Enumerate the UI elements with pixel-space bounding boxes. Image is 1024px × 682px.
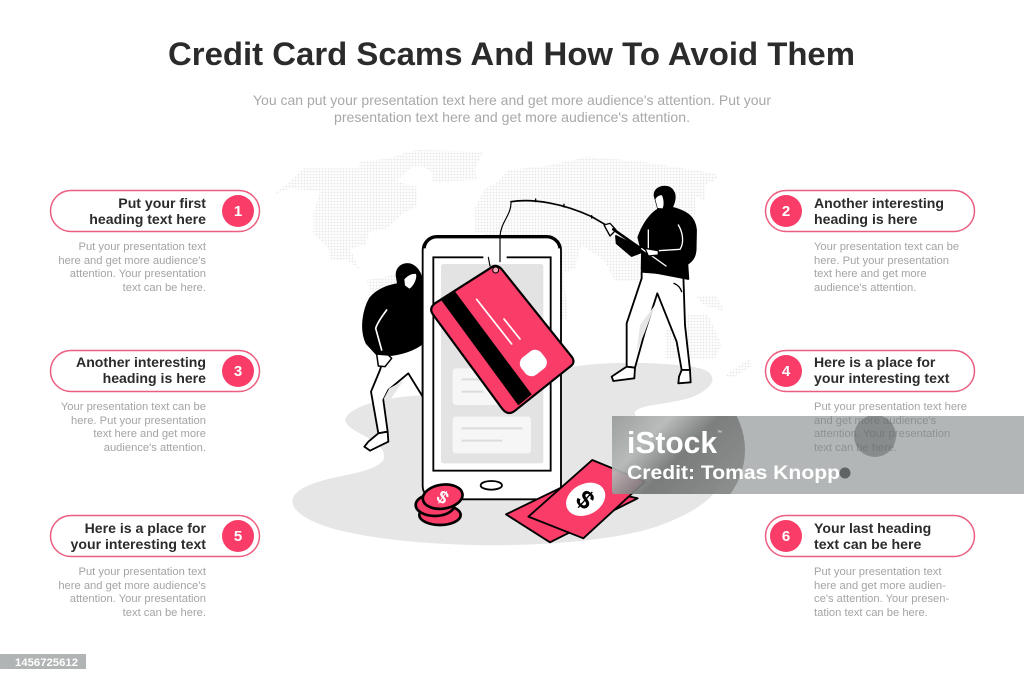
item 1: Put your first <box>118 195 206 211</box>
watermark: iStock <box>627 425 718 460</box>
world map <box>273 150 752 378</box>
subtitle: presentation text here and get more audience's attention. <box>334 110 690 125</box>
item 4: Here is a place for <box>814 354 936 370</box>
ground shadow <box>292 363 721 545</box>
illustration <box>273 150 752 545</box>
item 5: your interesting text <box>71 536 206 552</box>
banknotes <box>506 460 645 542</box>
watermark: ™ <box>717 430 722 436</box>
item 3: 3 <box>234 363 242 380</box>
item 2: here. Put your presentation <box>814 255 949 267</box>
item 3: here. Put your presentation <box>71 415 206 427</box>
item 3 <box>50 350 260 454</box>
item 1 <box>50 190 260 294</box>
item 1: text can be here. <box>123 282 206 294</box>
item 6: Put your presentation text <box>814 566 942 578</box>
coins: $ <box>433 486 453 508</box>
item 5: here and get more audience's <box>58 580 206 592</box>
fishing rod and line <box>488 199 613 266</box>
item 4: 4 <box>782 363 791 380</box>
watermark <box>612 416 1024 494</box>
watermark: Credit: Tomas Knopp <box>627 463 840 484</box>
item 5: Put your presentation text <box>78 566 207 578</box>
item 4: text can be here. <box>814 442 897 454</box>
item 2: text here and get more <box>814 268 927 280</box>
phone <box>423 237 561 499</box>
item 6 <box>766 516 974 619</box>
title: Credit Card Scams And How To Avoid Them <box>168 36 855 72</box>
banknotes: $ <box>570 484 601 516</box>
item 1: here and get more audience's <box>58 255 206 267</box>
trousers <box>627 272 690 370</box>
item 4: Put your presentation text here <box>814 401 967 413</box>
item 5: 5 <box>234 528 242 545</box>
item 5: Here is a place for <box>85 520 207 536</box>
item 5 <box>50 516 260 619</box>
subtitle <box>253 93 771 125</box>
credit card <box>431 266 573 413</box>
item 4 <box>766 350 974 454</box>
item 2: audience's attention. <box>814 282 916 294</box>
item 6: tation text can be here. <box>814 607 928 619</box>
item 2: Your presentation text can be <box>814 241 959 253</box>
item 4: your interesting text <box>814 370 950 386</box>
item 2 <box>766 190 974 294</box>
item 3: Your presentation text can be <box>61 401 206 413</box>
item 1: attention. Your presentation <box>70 268 206 280</box>
coins <box>416 482 464 525</box>
item 2: Another interesting <box>814 195 944 211</box>
item 6: 6 <box>782 528 790 545</box>
fisherman <box>604 187 696 383</box>
item 6: Your last heading <box>814 520 931 536</box>
item 1: Put your presentation text <box>78 241 207 253</box>
item 6: text can be here <box>814 536 921 552</box>
man hiding <box>363 264 423 451</box>
item 4: and get more audience's <box>814 415 937 427</box>
item 2: heading is here <box>814 211 918 227</box>
item 5: attention. Your presentation <box>70 593 206 605</box>
image id tag <box>0 654 86 669</box>
item 1: heading text here <box>89 211 206 227</box>
subtitle: You can put your presentation text here and get more audience's attention. Put your <box>253 93 771 108</box>
item 5: text can be here. <box>123 607 206 619</box>
item 6: ce's attention. Your presen- <box>814 593 950 605</box>
pants <box>371 343 423 433</box>
image id tag: 1456725612 <box>15 657 78 669</box>
item 3: heading is here <box>103 370 206 386</box>
item 4: attention. Your presentation <box>814 428 950 440</box>
item 3: text here and get more <box>93 428 206 440</box>
item 2: 2 <box>782 203 790 220</box>
item 6: here and get more audien- <box>814 580 946 592</box>
item 3: audience's attention. <box>104 442 206 454</box>
item 1: 1 <box>234 203 242 220</box>
item 3: Another interesting <box>76 354 206 370</box>
